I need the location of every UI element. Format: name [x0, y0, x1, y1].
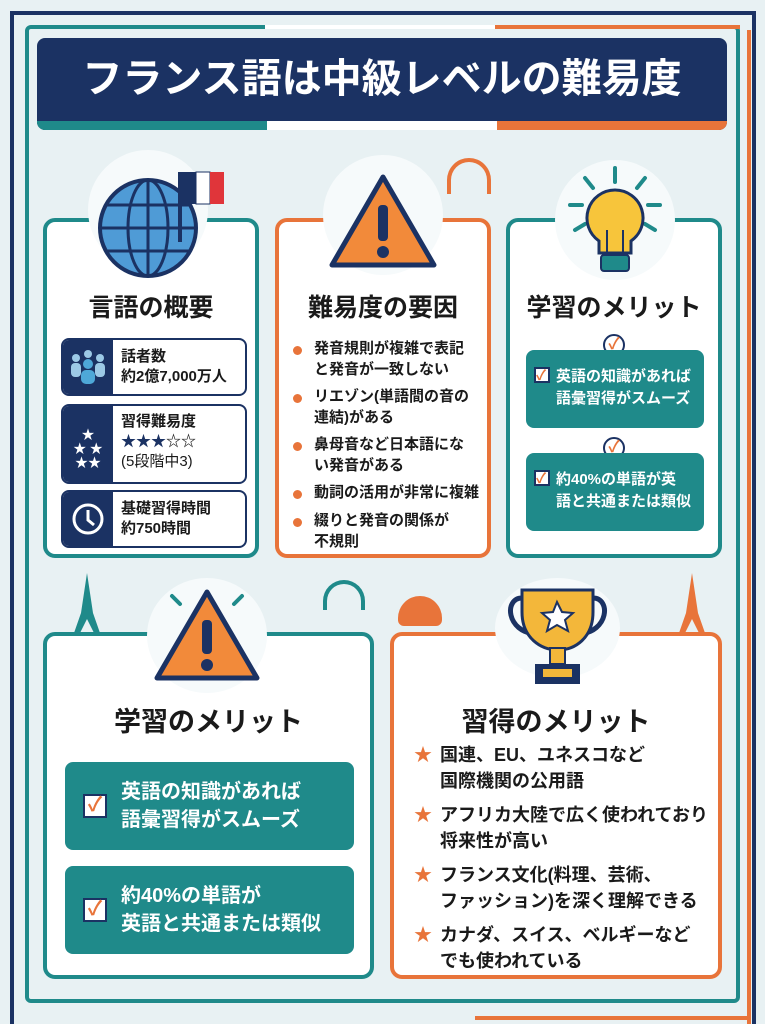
- panel: learning merits top right: [506, 218, 722, 558]
- heading: 学習のメリット: [114, 707, 303, 737]
- row difficulty: (5段階中3): [121, 453, 193, 470]
- panel: difficulty factors: 鼻母音など日本語にな: [314, 436, 464, 453]
- box 1: [65, 762, 354, 850]
- box 1: 英語の知識があれば: [121, 781, 301, 803]
- panel: difficulty factors: リエゾン(単語間の音の: [314, 388, 469, 405]
- panel: acquisition merits: ★: [414, 925, 432, 945]
- row speakers: 話者数: [121, 348, 166, 365]
- icon: globe with flag: [88, 150, 224, 278]
- box 2: 語と共通または類似: [556, 493, 691, 510]
- box 2: ✓: [88, 898, 102, 920]
- panel: language overview: [43, 218, 259, 558]
- title: [37, 38, 727, 130]
- icon: eiffel tower left: [74, 573, 100, 632]
- panel: acquisition merits: ★: [414, 745, 432, 765]
- panel: difficulty factors: 連結)がある: [314, 409, 394, 426]
- panel: acquisition merits: でも使われている: [440, 951, 583, 971]
- icon: warning triangle bottom: [147, 578, 267, 693]
- row difficulty: ★: [81, 427, 94, 442]
- panel: acquisition merits: ★: [414, 865, 432, 885]
- panel: acquisition merits: 国際機関の公用語: [440, 771, 584, 791]
- panel: acquisition merits: アフリカ大陸で広く使われており: [440, 805, 708, 825]
- row difficulty: ★★★☆☆: [121, 433, 196, 450]
- panel: acquisition merits: フランス文化(料理、芸術、: [440, 865, 662, 885]
- heading: 学習のメリット: [526, 294, 702, 322]
- title: フランス語は中級レベルの難易度: [82, 57, 682, 101]
- row speakers: [61, 338, 247, 396]
- box 2: 英語と共通または類似: [121, 913, 321, 935]
- check icon 2: [603, 437, 625, 459]
- check icon 2: ✓: [608, 439, 620, 456]
- panel: difficulty factors: [275, 218, 491, 558]
- row hours: 約750時間: [121, 520, 191, 537]
- panel: difficulty factors: と発音が一致しない: [314, 361, 449, 378]
- panel: difficulty factors: 不規則: [314, 533, 359, 550]
- check icon 1: ✓: [608, 336, 620, 353]
- row speakers: 約2億7,000万人: [121, 368, 227, 385]
- icon: croissant top: [447, 158, 491, 194]
- box 1: ✓: [88, 794, 102, 816]
- bullet list: [293, 340, 479, 550]
- panel: acquisition merits: [390, 632, 722, 979]
- star list: [414, 745, 708, 971]
- row difficulty: 習得難易度: [121, 413, 196, 430]
- box 2: 約40%の単語が英: [556, 471, 676, 488]
- icon: warning triangle top: [323, 155, 443, 275]
- box 1: 英語の知識があれば: [556, 368, 691, 385]
- row difficulty: ★ ★: [73, 441, 103, 456]
- panel: acquisition merits: カナダ、スイス、ベルギーなど: [440, 925, 691, 945]
- row hours: 基礎習得時間: [121, 500, 211, 517]
- heading: 習得のメリット: [462, 707, 650, 737]
- box 1: [526, 350, 704, 428]
- row difficulty: [61, 404, 247, 484]
- panel: acquisition merits: ファッション)を深く理解できる: [440, 891, 698, 911]
- panel: difficulty factors: い発音がある: [314, 457, 404, 474]
- panel: acquisition merits: 将来性が高い: [440, 831, 548, 851]
- row hours: [61, 490, 247, 548]
- icon: croissant middle: [323, 580, 365, 610]
- panel: difficulty factors: 綴りと発音の関係が: [314, 512, 449, 529]
- box 2: 約40%の単語が: [121, 885, 261, 907]
- box 1: 語彙習得がスムーズ: [121, 809, 300, 831]
- icon: trophy: [495, 578, 620, 684]
- row difficulty: ★★: [75, 455, 101, 470]
- box 1: 語彙習得がスムーズ: [556, 390, 690, 407]
- icon: croissant orange: [398, 596, 442, 626]
- panel: acquisition merits: ★: [414, 805, 432, 825]
- box 2: [65, 866, 354, 954]
- box 2: ✓: [536, 470, 546, 486]
- box 2: [526, 453, 704, 531]
- heading: 言語の概要: [88, 294, 214, 322]
- check icon 1: [603, 334, 625, 356]
- icon: eiffel tower right: [679, 573, 705, 632]
- panel: acquisition merits: 国連、EU、ユネスコなど: [440, 745, 645, 765]
- heading: 難易度の要因: [308, 294, 458, 322]
- panel: difficulty factors: 動詞の活用が非常に複雑: [314, 484, 479, 501]
- panel: learning merits bottom left: [43, 632, 374, 979]
- box 1: ✓: [536, 367, 546, 383]
- icon: light bulb: [555, 160, 675, 280]
- panel: difficulty factors: 発音規則が複雑で表記: [314, 340, 464, 357]
